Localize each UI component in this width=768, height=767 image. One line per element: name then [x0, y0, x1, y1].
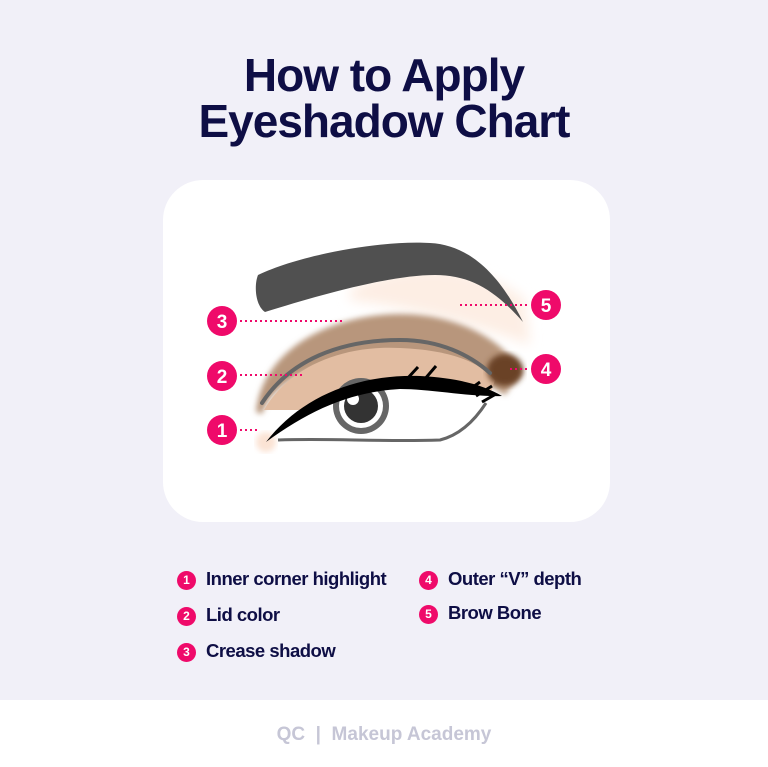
iris — [333, 378, 389, 434]
eye illustration: 5 — [541, 296, 552, 317]
title — [198, 49, 570, 147]
legend item 4: Outer “V” depth — [448, 568, 581, 589]
footer: QC | Makeup Academy — [277, 724, 491, 745]
inner highlight — [256, 432, 276, 452]
legend item 5: Brow Bone — [448, 602, 541, 623]
upper lid liner and lashes — [266, 366, 502, 442]
legend item 3: Crease shadow — [206, 640, 335, 661]
brow bone highlight — [350, 269, 530, 345]
crease line — [262, 340, 490, 403]
eye illustration: 3 — [217, 312, 227, 333]
legend item 2: 2 — [183, 609, 190, 623]
legend item 2: Lid color — [206, 604, 280, 625]
lower lid — [278, 403, 486, 441]
eye illustration: 4 — [541, 360, 552, 381]
legend item 3: 3 — [183, 645, 190, 659]
footer — [0, 700, 768, 767]
lid color — [264, 348, 495, 410]
callout markers — [207, 290, 561, 445]
eye illustration: 2 — [217, 367, 227, 388]
panel: eye card — [163, 180, 610, 522]
legend item 4: 4 — [425, 573, 432, 587]
title: Eyeshadow Chart — [198, 95, 570, 147]
legend item 1: Inner corner highlight — [206, 568, 386, 589]
callout dotted lines — [240, 305, 528, 430]
legend item 2 — [177, 604, 280, 626]
legend item 1: 1 — [183, 573, 190, 587]
brow — [256, 243, 523, 322]
legend item 5: 5 — [425, 607, 432, 621]
crease shadow — [256, 314, 522, 414]
eye illustration: 1 — [217, 421, 228, 442]
outer V — [487, 354, 523, 386]
title: How to Apply — [244, 49, 524, 101]
